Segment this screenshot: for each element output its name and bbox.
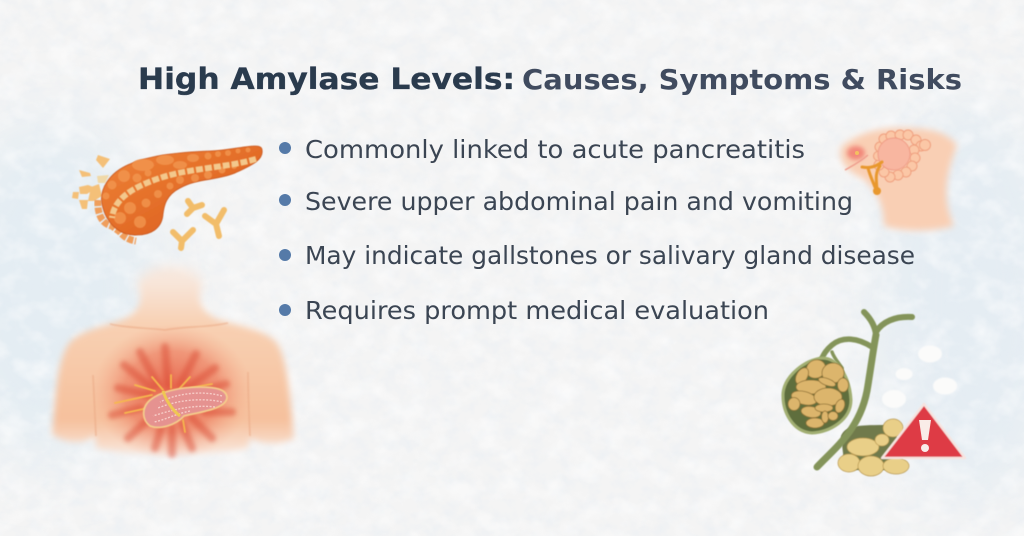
red spot <box>847 146 865 160</box>
exclamation mark <box>919 420 931 440</box>
gland centre <box>878 138 910 170</box>
bullet: gallstones: May indicate gallstones or salivary gland disease <box>305 241 915 270</box>
lower stones <box>838 419 909 476</box>
yellow sparks <box>115 375 212 432</box>
white blobs <box>882 346 957 408</box>
warning triangle <box>882 404 965 458</box>
pancreatic duct <box>112 159 256 218</box>
illustration: torso with inflamed pancreas <box>52 267 294 460</box>
salivary duct <box>862 162 882 194</box>
jaw line <box>845 155 868 170</box>
pancreas body <box>102 146 262 235</box>
bile ducts <box>817 312 912 467</box>
inflammation glow <box>92 324 252 460</box>
bullet: acute pancreatitis: Commonly linked to acute pancreatitis <box>305 135 805 164</box>
pancreas lobules <box>102 148 250 228</box>
lobule ring <box>874 130 930 182</box>
title <box>138 62 962 96</box>
gallbladder sac <box>783 358 851 433</box>
illustration: gallstones with warning <box>783 312 965 476</box>
pancreas texture <box>153 393 222 422</box>
bile duct <box>163 391 180 416</box>
illustration: pancreas with enzymes <box>72 146 262 248</box>
pancreas outer rim <box>98 200 136 241</box>
bullet: abdominal pain: Severe upper abdominal pain and vomiting <box>305 187 853 216</box>
enzyme Y shapes <box>173 201 224 248</box>
body silhouette <box>52 282 294 454</box>
inflammation rays <box>112 347 232 454</box>
lower stone cavity <box>841 425 905 470</box>
title: Causes, Symptoms & Risks <box>522 63 962 96</box>
title: High Amylase Levels: <box>138 62 515 96</box>
gallstones in sac <box>788 356 848 428</box>
neck glow <box>138 267 202 303</box>
neck and jaw <box>840 128 957 230</box>
bullet list <box>279 135 915 325</box>
inflamed pancreas <box>144 387 227 427</box>
arm creases <box>93 323 250 436</box>
illustration: salivary gland in neck <box>840 128 957 230</box>
enzyme fragments <box>72 155 110 209</box>
bullet: evaluation: Requires prompt medical evaluation <box>305 296 769 325</box>
